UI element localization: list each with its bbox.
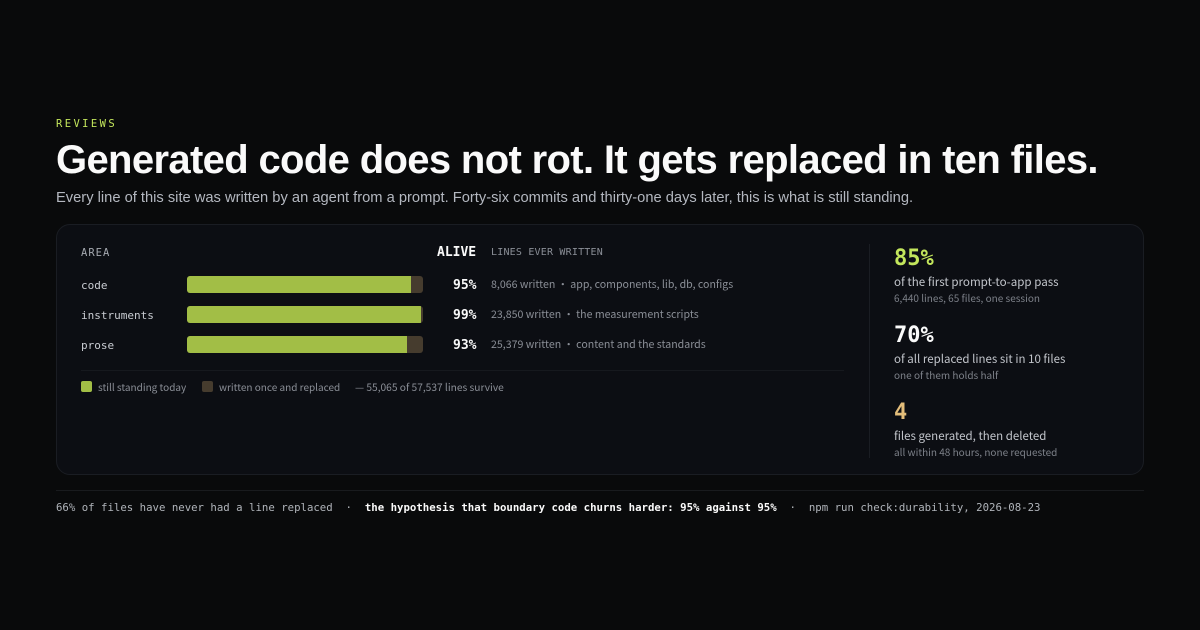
bar: instruments 99% [187,306,423,323]
table header: alive: ALIVE [437,245,476,260]
stat: 70%: one of them holds half [894,367,998,382]
row: instruments [81,306,699,323]
detail: instruments: · [563,307,574,322]
stat: 4: files generated, then deleted [894,428,1046,444]
stat: 85%: 85% [894,246,934,271]
stat: 70%: of all replaced lines sit in 10 files [894,351,1065,367]
detail: code: · [558,277,568,292]
value: code 95%: 95% [453,278,476,293]
detail: instruments: 23,850 written the measurement scripts [491,307,699,322]
subtitle: Every line of this site was written by an agent from a prompt. Forty-six commits and thirty-one days later, this is what is still standing. [56,190,913,206]
stat: 4: all within 48 hours, none requested [894,444,1057,459]
bar: prose 93% [187,336,423,353]
value: prose 93%: 93% [453,338,476,353]
stat: 70%: 70% [894,323,934,348]
stat: 85% [894,246,1059,305]
stat: 70% [894,323,1065,382]
row: code [81,276,733,293]
detail: code: 8,066 written app, components, lib, db, configs [491,277,733,292]
legend [81,379,504,394]
row: prose: prose [81,339,114,352]
legend label: still standing: still standing today [98,379,186,394]
stat: 85%: 6,440 lines, 65 files, one session [894,290,1040,305]
eyebrow label: REVIEWS [56,118,117,130]
legend label: replaced: written once and replaced [219,379,340,394]
stat: 4: 4 [894,400,907,425]
panel: durability [56,224,1144,475]
detail: prose: 25,379 written content and the standards [491,337,706,352]
value: instruments 99%: 99% [453,308,476,323]
row: code: code [81,279,108,292]
row: instruments: instruments [81,309,154,322]
detail: prose: · [563,337,574,352]
legend note: total: — 55,065 of 57,537 lines survive [355,379,504,394]
stat: 4 [894,400,1057,459]
stat: 85%: of the first prompt-to-app pass [894,274,1059,290]
legend swatch: still standing [81,381,92,392]
table header: lines ever written: LINES EVER WRITTEN [491,247,603,258]
legend swatch: replaced [202,381,213,392]
bar: code 95% [187,276,423,293]
title: Generated code does not rot. It gets replaced in ten files. [56,138,1098,182]
row: prose [81,336,706,353]
footer line: 66% of files have never had a line replaced · the hypothesis that boundary code churns harder: 95% against 95% · npm run check:durability, 2026-08-23 [56,501,1040,514]
table header: area: AREA [81,247,110,259]
